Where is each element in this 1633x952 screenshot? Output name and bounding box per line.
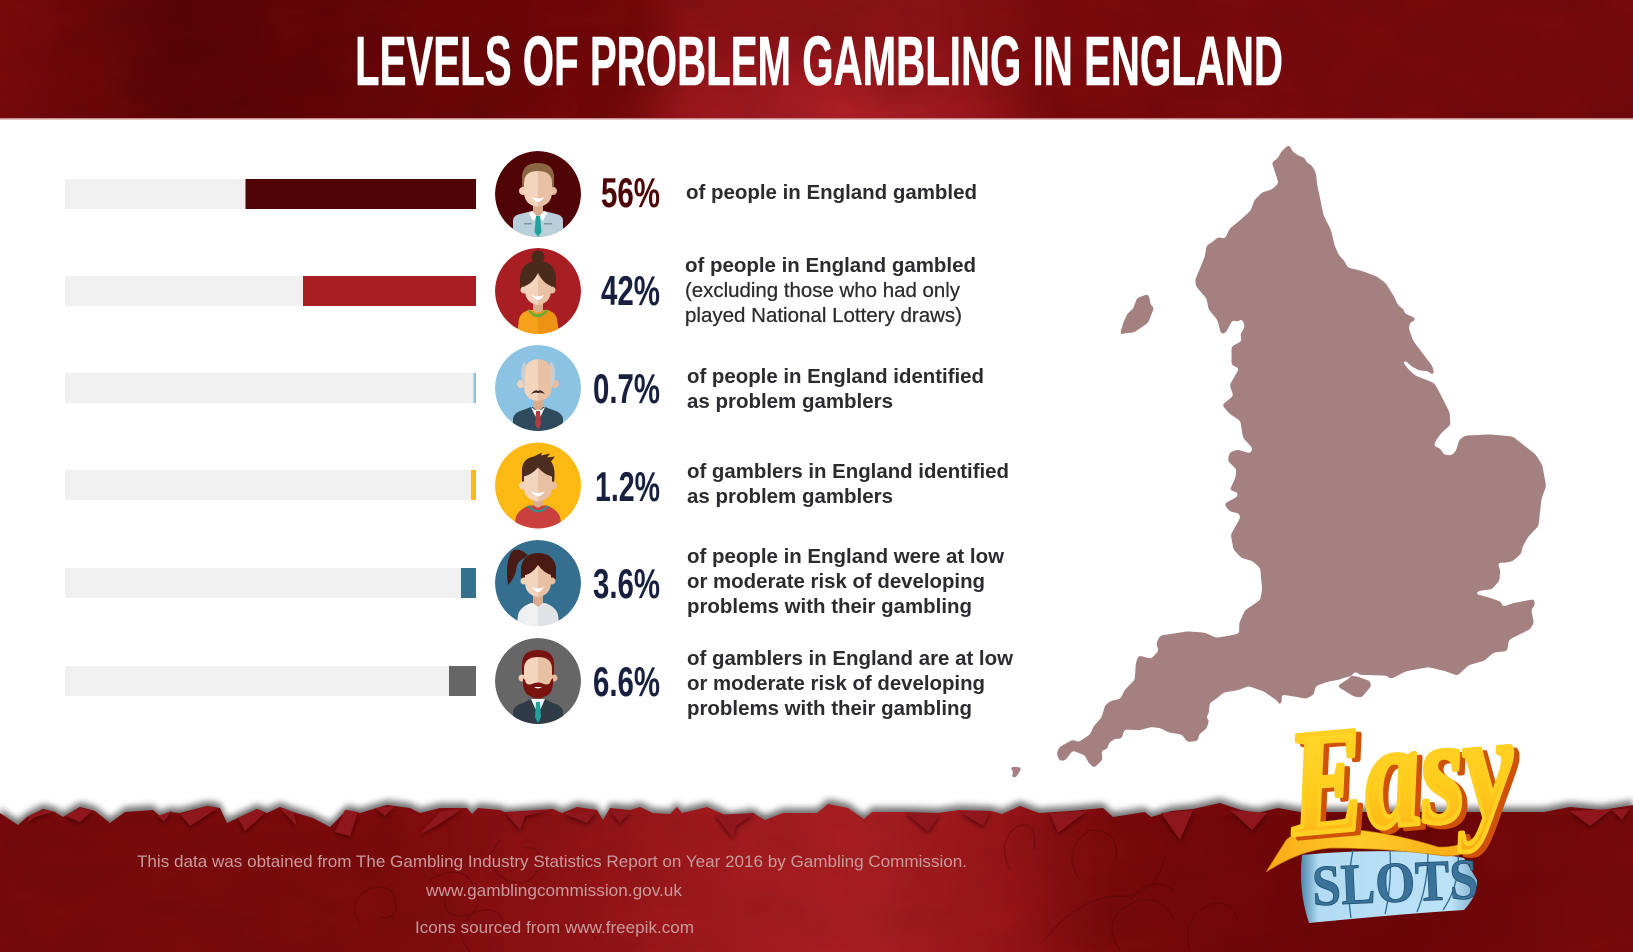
row 6: 6.6% (65, 638, 1013, 724)
description: problems with their gambling (687, 697, 972, 720)
description: of people in England identified (687, 365, 984, 388)
map of England (1009, 144, 1546, 777)
logo script word: Easy (1286, 686, 1527, 871)
description (687, 545, 1004, 618)
logo reel: SLOTS (1311, 846, 1479, 918)
logo ribbon (1266, 808, 1496, 872)
source credits: This data was obtained from The Gambling Industry Statistics Report on Year 2016 by Gambling Commission. (137, 852, 967, 871)
mainland England (1057, 144, 1546, 768)
source credits: www.gamblingcommission.gov.uk (425, 881, 682, 900)
value: 6.6%: 6.6% (593, 658, 660, 705)
description (685, 254, 976, 327)
description: of people in England gambled (686, 181, 977, 204)
description: (excluding those who had only (685, 279, 961, 302)
value: 56%: 56% (601, 169, 660, 216)
description: or moderate risk of developing (687, 672, 985, 695)
bar: 56% (65, 179, 476, 209)
description: of gamblers in England identified (687, 460, 1009, 483)
avatar: woman with hair bun (495, 248, 581, 334)
Isle of Wight (1337, 676, 1371, 697)
description: played National Lottery draws) (685, 304, 962, 327)
description (687, 647, 1013, 720)
Isle of Man (1119, 294, 1154, 336)
value: 42%: 42% (601, 267, 660, 314)
avatar: man in shirt and tie (495, 151, 581, 237)
avatar: woman with ponytail (495, 540, 581, 626)
avatar: young man with spiky hair (495, 442, 581, 528)
description (687, 365, 984, 413)
bar: 42% (65, 276, 476, 306)
value: 3.6%: 3.6% (593, 560, 660, 607)
row 4: 1.2% (65, 442, 1009, 528)
description: of people in England gambled (685, 254, 976, 277)
logo: Easy Slots (1266, 682, 1527, 923)
value: 0.7%: 0.7% (593, 365, 660, 412)
bar: 3.6% (65, 568, 476, 598)
description (687, 460, 1009, 508)
bar: 0.7% (65, 373, 476, 403)
torn footer band (0, 798, 1633, 952)
row 3: 0.7% (65, 345, 984, 431)
description: problems with their gambling (687, 595, 972, 618)
bar: 1.2% (65, 470, 476, 500)
header banner (0, 0, 1633, 120)
torn paper flaps (27, 806, 1630, 840)
description: or moderate risk of developing (687, 570, 985, 593)
source credits: Icons sourced from www.freepik.com (415, 918, 694, 937)
row 2: 42% (65, 248, 976, 334)
avatar: older man in suit (495, 345, 581, 431)
bar: 6.6% (65, 666, 476, 696)
row 5: 3.6% (65, 540, 1004, 626)
description: of gamblers in England are at low (687, 647, 1013, 670)
logo script word: Easy (1280, 682, 1521, 868)
decorative swirls (355, 825, 1238, 952)
avatar: bearded man in suit (495, 638, 581, 724)
description: of people in England were at low (687, 545, 1004, 568)
row 1: 56% (65, 151, 977, 237)
source credits (137, 852, 967, 937)
description: as problem gamblers (687, 390, 893, 413)
value: 1.2%: 1.2% (595, 463, 660, 510)
Isles of Scilly (1009, 767, 1022, 777)
description: as problem gamblers (687, 485, 893, 508)
